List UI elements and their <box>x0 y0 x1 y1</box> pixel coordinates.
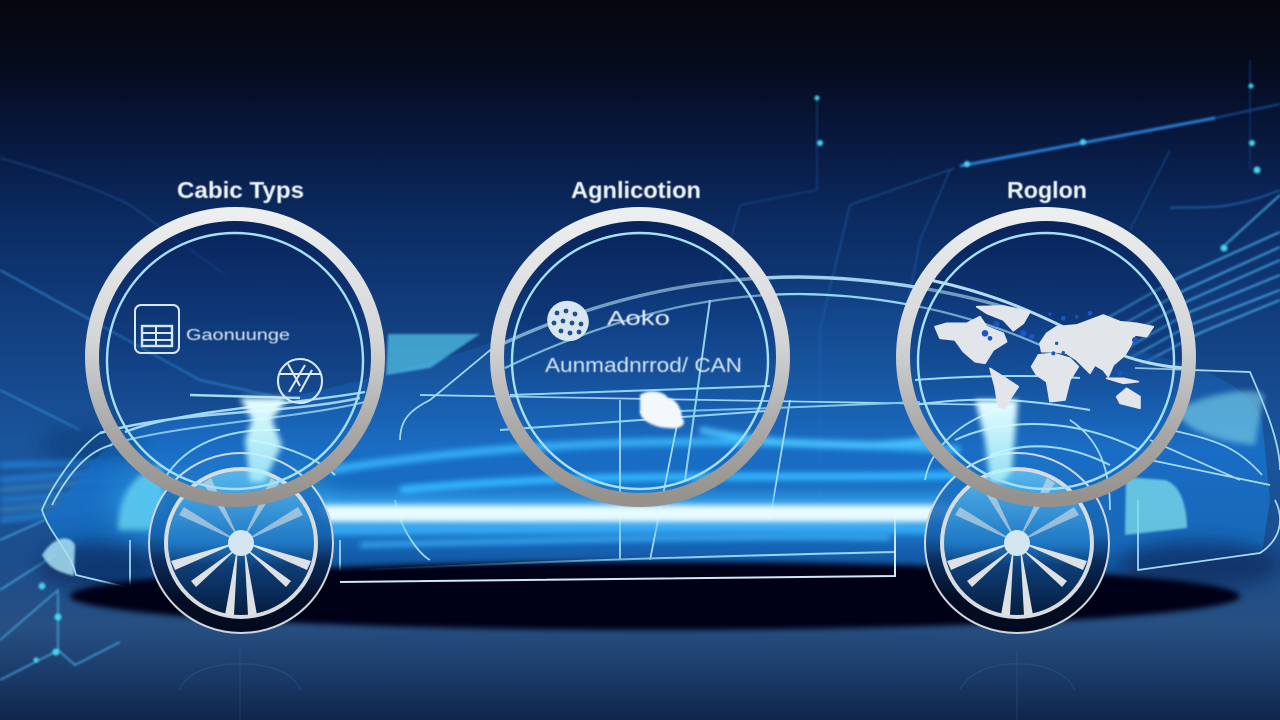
metal ring <box>903 214 1189 500</box>
panel: region <box>903 177 1190 500</box>
window glow <box>386 334 480 375</box>
ring disc <box>98 220 372 494</box>
ground shadow <box>70 562 1240 630</box>
car body <box>40 277 1280 590</box>
car sill line <box>340 512 895 582</box>
front wheel-arch glow <box>118 465 170 530</box>
label: application item two: Aunmadnrrod/ CAN <box>545 355 742 377</box>
inner ring <box>107 233 363 489</box>
inner wire lines <box>500 300 780 480</box>
label: cable type item: Gaonuunge <box>186 327 290 344</box>
icon: cloud <box>640 391 684 428</box>
icon: wire mesh ball <box>541 294 595 348</box>
headlight <box>42 538 75 576</box>
front wheel <box>148 453 334 633</box>
heading: cable types: Cabic Typs <box>177 177 304 203</box>
end shading <box>40 427 1280 589</box>
streak glow left <box>0 462 140 520</box>
light funnel <box>240 398 288 482</box>
heading: application: Agnlicotion <box>571 177 701 203</box>
body fill <box>45 278 1270 590</box>
ring disc <box>909 220 1183 494</box>
wireframe outlines <box>42 277 1280 588</box>
circuit nodes <box>34 84 1260 662</box>
body light streaks <box>330 430 960 545</box>
inner wire lines <box>915 280 1190 465</box>
icon: cable table <box>135 305 179 353</box>
inner wire lines <box>110 392 365 478</box>
label: application item one: Aoko <box>607 308 670 330</box>
world map <box>935 306 1153 408</box>
rear wheel <box>924 453 1110 633</box>
panel: application <box>497 177 783 500</box>
heading: region: Roglon <box>1007 177 1087 203</box>
icon: globe <box>278 359 322 403</box>
inner ring <box>512 233 768 489</box>
wheel reflections <box>180 650 1075 720</box>
light funnel <box>975 400 1018 482</box>
panel: cable types <box>92 177 378 500</box>
inner ring <box>918 233 1174 489</box>
light bar <box>120 480 980 530</box>
metal ring <box>92 214 378 500</box>
rear light <box>1125 477 1187 535</box>
metal ring <box>497 214 783 500</box>
ring disc <box>503 220 777 494</box>
